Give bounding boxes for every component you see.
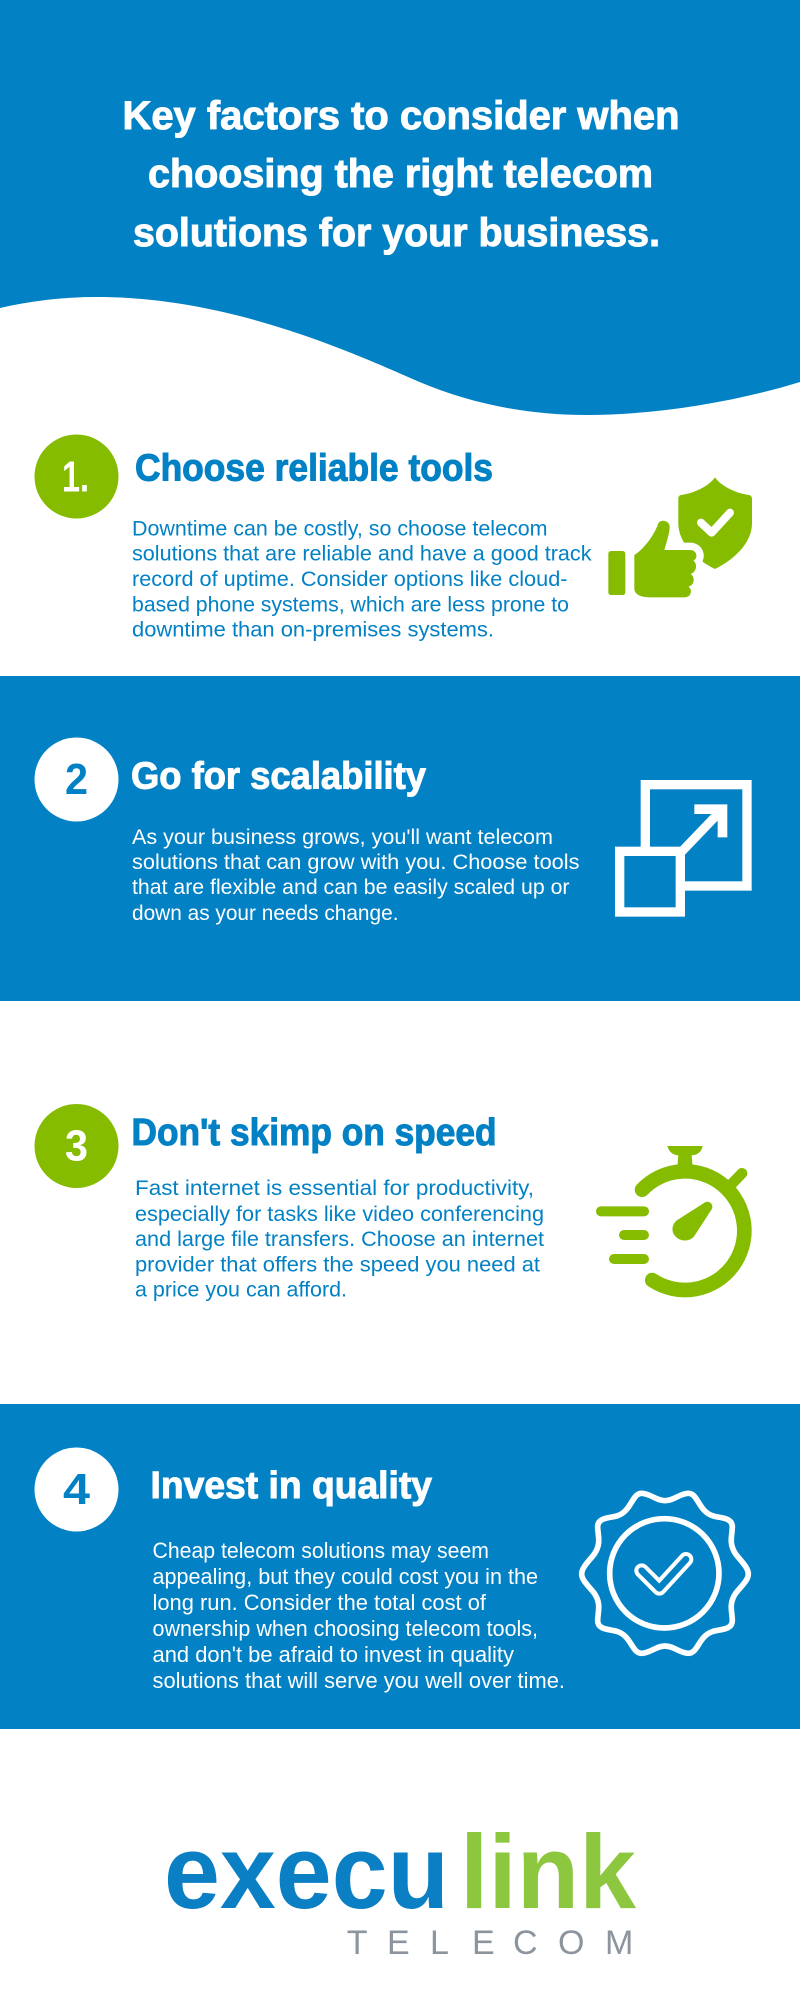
body text 4: Cheap telecom solutions may seem (152, 1538, 489, 1563)
panel: go for scalability (0, 676, 800, 1001)
body text 3: and large file transfers. Choose an internet (135, 1228, 544, 1251)
body text 3: a price you can afford. (135, 1279, 347, 1302)
body text 4: appealing, but they could cost you in the (152, 1564, 538, 1589)
body text 2: solutions that can grow with you. Choose tools (132, 851, 580, 874)
body text 3: Fast internet is essential for productivity, (135, 1177, 534, 1200)
body text 2 (132, 826, 580, 925)
number badge 2 (34, 738, 118, 822)
title (122, 94, 680, 255)
icon: quality badge (582, 1493, 748, 1653)
heading 4: Invest in quality (150, 1465, 432, 1507)
number badge 3 (34, 1104, 118, 1188)
number badge 4 (34, 1448, 118, 1532)
number badge 3: 3 (65, 1122, 88, 1170)
icon: stopwatch (596, 1146, 744, 1290)
icon: thumbs up and shield (608, 477, 752, 597)
body text 1 (132, 518, 592, 642)
panel: choose reliable tools (0, 420, 800, 676)
icon: scale up squares (620, 785, 747, 912)
heading 1: Choose reliable tools (135, 448, 493, 490)
title: Key factors to consider when (122, 94, 680, 138)
logo: execulink telecom: link (460, 1814, 637, 1931)
body text 4 (152, 1538, 565, 1693)
panel: don't skimp on speed (0, 1001, 800, 1404)
body text 4: long run. Consider the total cost of (152, 1590, 487, 1615)
body text 4: ownership when choosing telecom tools, (152, 1616, 538, 1641)
body text 4: and don't be afraid to invest in quality (152, 1642, 514, 1667)
panel: invest in quality (0, 1404, 800, 1729)
body text 1: record of uptime. Consider options like cloud- (132, 568, 568, 591)
body text 2: down as your needs change. (132, 902, 398, 925)
body text 1: based phone systems, which are less prone to (132, 593, 569, 616)
logo: execulink telecom: TELECOM (347, 1924, 633, 1962)
body text 1: solutions that are reliable and have a good track (132, 543, 592, 566)
body text 3: provider that offers the speed you need at (135, 1254, 540, 1276)
number badge 1: 1. (62, 452, 89, 502)
heading 2: Go for scalability (131, 756, 426, 798)
header panel with wave (0, 0, 800, 415)
body text 1: downtime than on-premises systems. (132, 619, 494, 642)
body text 2: As your business grows, you'll want telecom (132, 826, 553, 849)
body text 1: Downtime can be costly, so choose telecom (132, 518, 548, 540)
heading 3: Don't skimp on speed (132, 1112, 496, 1154)
body text 2: that are flexible and can be easily scaled up or (132, 876, 570, 899)
title: solutions for your business. (133, 211, 660, 255)
title: choosing the right telecom (148, 152, 653, 196)
number badge 2: 2 (65, 755, 88, 804)
body text 4: solutions that will serve you well over time. (152, 1668, 565, 1693)
logo: execulink telecom: execu (164, 1814, 449, 1931)
body text 3: especially for tasks like video conferencing (135, 1203, 544, 1226)
logo: execulink telecom (164, 1814, 637, 1962)
body text 3 (135, 1177, 544, 1302)
number badge 4: 4 (63, 1465, 91, 1514)
number badge 1 (34, 434, 118, 518)
